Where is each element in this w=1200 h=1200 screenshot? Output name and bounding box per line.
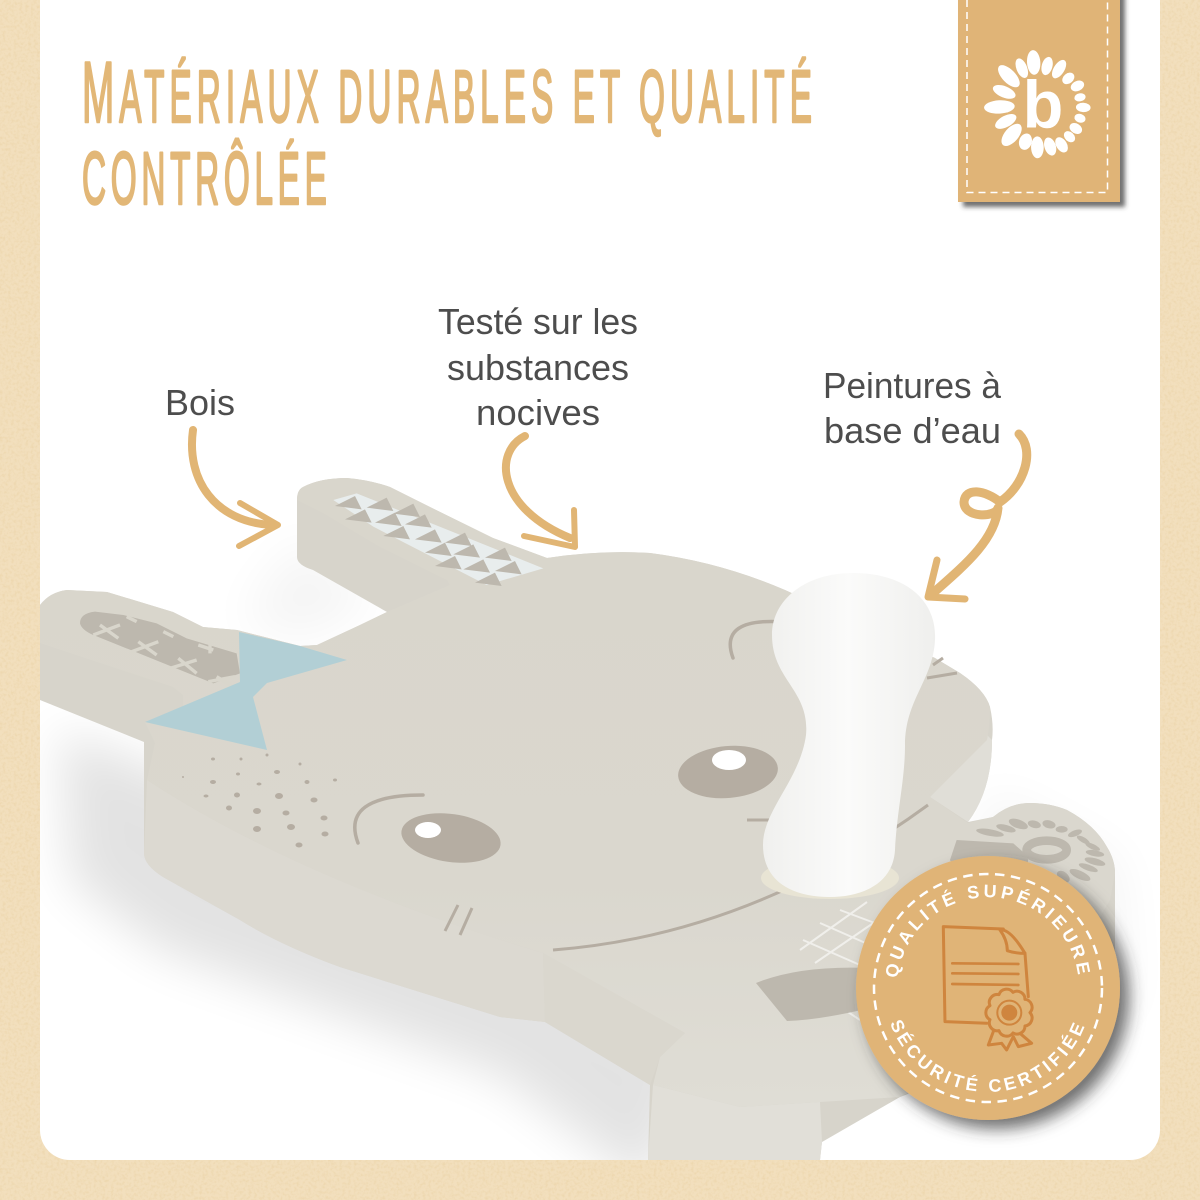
body lower side bbox=[144, 780, 545, 1022]
icon: certificate bbox=[943, 927, 1032, 1050]
label: Testé sur les substances nocives: substances bbox=[447, 347, 629, 388]
toy silhouette sides bbox=[40, 478, 1115, 1160]
badge dashed ring bbox=[874, 874, 1102, 1102]
label: Peintures à base d'eau: Peintures à bbox=[823, 365, 1002, 406]
quality badge bbox=[854, 854, 1142, 1142]
arrow: Peintures bbox=[928, 434, 1027, 599]
title: MATÉRIAUX DURABLES ET QUALITÉ bbox=[82, 46, 812, 141]
icon: brand logo bbox=[984, 50, 1091, 158]
whiskers and smile bbox=[445, 658, 957, 950]
grey patch bbox=[756, 968, 858, 1021]
right eye bbox=[676, 621, 785, 802]
label: Bois: Bois bbox=[165, 382, 235, 423]
ear and right soft shadow bbox=[293, 584, 320, 606]
brand tag bbox=[958, 0, 1120, 202]
bunny toy product photo bbox=[40, 478, 1130, 1190]
badge text top: QUALITÉ SUPÉRIEURE bbox=[886, 884, 1090, 977]
label: Peintures à base d'eau bbox=[823, 365, 1002, 451]
arrow: Bois bbox=[192, 430, 278, 546]
blue bow tie bbox=[145, 632, 347, 750]
icon: brand logo: b bbox=[1023, 68, 1063, 142]
freckle dots bbox=[182, 754, 337, 848]
badge text bottom: SÉCURITÉ CERTIFIÉE bbox=[891, 1020, 1084, 1092]
top ear triangle pattern bbox=[333, 493, 543, 586]
foot front side bbox=[648, 1085, 822, 1160]
white wooden peg bbox=[763, 573, 935, 897]
label: Testé sur les substances nocives: nocives bbox=[476, 392, 600, 433]
wooden peg base bbox=[761, 868, 899, 899]
toy top surface bbox=[40, 478, 1115, 1107]
ring hole of foot logo bbox=[1038, 846, 1056, 854]
tag ribbon bbox=[958, 0, 1120, 202]
title bbox=[82, 46, 812, 221]
label: Peintures à base d'eau: base d’eau bbox=[824, 410, 1001, 451]
label: Testé sur les substances nocives bbox=[438, 301, 638, 433]
label: Testé sur les substances nocives: Testé sur les bbox=[438, 301, 638, 342]
toy soft shadow bbox=[52, 734, 650, 1160]
arrow: Testé bbox=[506, 436, 575, 547]
foot crease face bbox=[543, 953, 685, 1085]
right head side bbox=[930, 735, 992, 822]
left ear cross pattern bbox=[80, 612, 240, 687]
badge disc bbox=[856, 856, 1120, 1120]
tag stitching bbox=[967, 0, 1108, 192]
right foot logo bbox=[950, 816, 1106, 885]
left eye bbox=[355, 795, 504, 869]
grid pattern on body bbox=[800, 901, 874, 1021]
title: CONTRÔLÉE bbox=[82, 138, 327, 221]
